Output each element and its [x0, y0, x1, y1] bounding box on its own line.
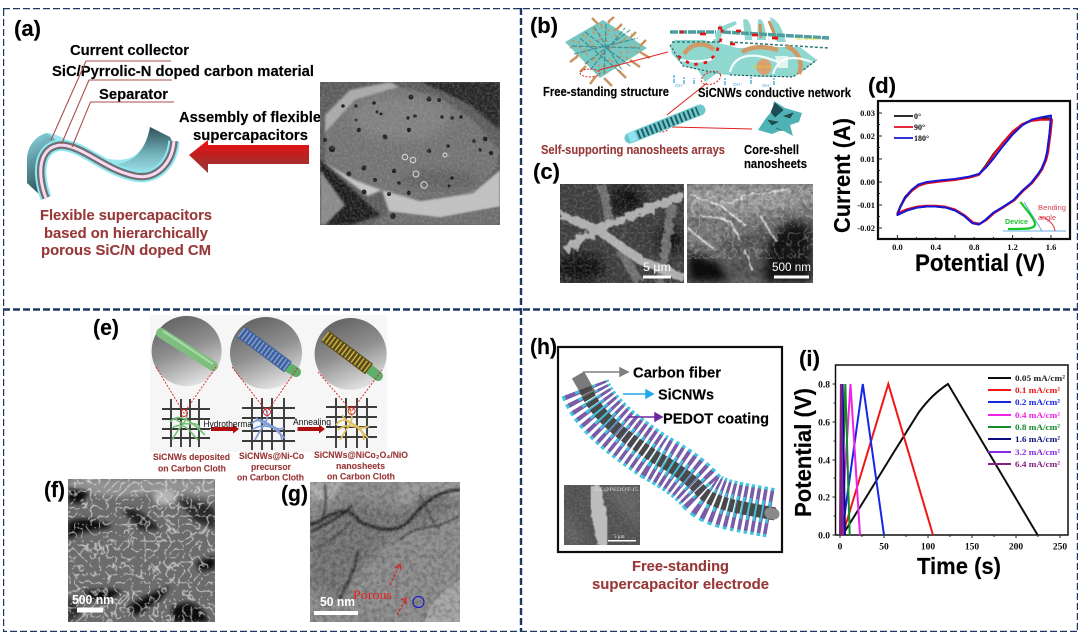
text: PEDOT coating: PEDOT coating	[663, 412, 769, 428]
arrow: SiCNWs	[623, 390, 653, 398]
label: (e): (e)	[93, 315, 119, 340]
legend: 0.1 mA/cm²	[1015, 385, 1060, 395]
legend: 0.8 mA/cm²	[1015, 422, 1060, 432]
caption: free-standing supercapacitor electrode: supercapacitor electrode	[592, 577, 769, 593]
x tick labels: 50	[879, 542, 889, 552]
icon: carbon cloth grids	[162, 398, 377, 450]
caption: SiCNWs@Ni-Co precursor: on Carbon Cloth	[237, 472, 304, 482]
icon: SiCNW conductive network: OH⁻	[762, 83, 772, 88]
panel: (g) TEM image	[281, 481, 460, 622]
text: SiCNWs conductive network: SiCNWs conductive network	[698, 85, 852, 100]
arrow: PEDOT	[628, 413, 662, 421]
inset: bending angle diagram	[1003, 202, 1066, 231]
inset: SEM of coated fiber: 5 µm	[614, 535, 625, 540]
arrow: hydrothermal	[211, 424, 239, 434]
text: core-shell nanosheets: nanosheets	[744, 157, 807, 171]
icon: SiCNW conductive network: SiC nanowire	[796, 37, 819, 41]
caption: SiCNWs@NiCo2O4/NiO: on Carbon Cloth	[327, 472, 395, 482]
image: SEM micrograph f	[68, 479, 215, 622]
icon: curved supercapacitor device	[27, 127, 174, 198]
text: carbon fiber: Carbon fiber	[633, 366, 721, 382]
caption: SiCNWs deposited: SiCNWs deposited	[153, 452, 230, 462]
scale bar: 50 nm: 50 nm	[320, 595, 355, 609]
frame: electrode schematic	[558, 347, 782, 552]
caption: flexible supercapacitors: porous SiC/N doped CM	[41, 243, 211, 259]
arrows: porous regions	[390, 564, 406, 615]
y tick labels: 0.00	[860, 177, 875, 187]
backdrop of schematic	[150, 315, 387, 452]
chart: cyclic voltammetry under bending	[857, 101, 1070, 252]
label: (b): (b)	[530, 13, 558, 38]
text: core-shell nanosheets	[744, 143, 807, 171]
label: (c): (c)	[533, 159, 560, 184]
y tick labels: -0.01	[857, 200, 875, 210]
text: SiCNWs: SiCNWs	[658, 388, 714, 404]
caption: SiCNWs@NiCo2O4/NiO: SiCNWs@NiCo₂O₄/NiO	[314, 450, 408, 460]
text: hydrothermal: Hydrotherma	[204, 419, 252, 429]
legend: 180°	[914, 134, 929, 143]
y tick labels: 0.0	[818, 532, 830, 542]
y tick labels: 0.8	[818, 380, 830, 390]
icon: zoom circle with gold nanowire	[315, 318, 387, 390]
annotation: porous: Porous	[353, 587, 392, 602]
panel: (c) SEM images	[533, 159, 813, 283]
legend	[988, 373, 1065, 469]
image: SEM 500 nm	[687, 184, 813, 283]
panel: (f) SEM nanosheets	[44, 477, 215, 622]
inset: SEM of coated fiber: SiC@PEDOT-15	[594, 488, 639, 493]
panel: (i) charge-discharge chart	[790, 346, 1068, 579]
y tick labels: 0.6	[818, 418, 830, 428]
icon: fiber with SiCNWs and PEDOT bristles	[578, 375, 775, 514]
axis title: current: Current (A)	[829, 118, 855, 233]
text: core-shell nanosheets: Core-shell	[744, 143, 799, 157]
inset: bending angle diagram: angle	[1038, 213, 1056, 222]
caption: free-standing supercapacitor electrode: Free-standing	[632, 559, 729, 575]
text: current collector: Current collector	[70, 43, 189, 59]
legend: 0.2 mA/cm²	[1015, 397, 1060, 407]
panel: (b) self-supporting nanosheets	[530, 13, 852, 171]
image: TEM micrograph	[310, 482, 460, 622]
icon: SiCNW conductive network: Carbon fiber	[752, 65, 774, 69]
caption: flexible supercapacitors: Flexible supercapacitors	[40, 208, 212, 224]
x tick labels	[892, 242, 1056, 252]
caption: SiCNWs@Ni-Co precursor: SiCNWs@Ni-Co	[239, 451, 304, 461]
arrow: annealing	[298, 424, 325, 434]
icon: free-standing woven mat	[565, 17, 650, 86]
x tick labels: 100	[921, 542, 935, 552]
caption: SiCNWs@Ni-Co precursor	[237, 451, 304, 482]
label: (d): (d)	[868, 73, 896, 98]
icon: coated nanowire	[629, 110, 700, 138]
scale bar: 50 nm	[314, 595, 358, 615]
y tick labels: 0.2	[818, 494, 830, 504]
y tick labels	[818, 380, 830, 542]
caption: flexible supercapacitors	[40, 208, 212, 259]
curves	[840, 384, 1038, 535]
caption: SiCNWs deposited: on Carbon Cloth	[158, 464, 226, 474]
curves: 0, 90, 180 degrees	[897, 115, 1052, 224]
image: porous SEM micrograph	[320, 82, 500, 225]
legend: 6.4 mA/cm²	[1015, 459, 1060, 469]
image: SEM 5 µm	[560, 184, 684, 283]
y tick labels: 0.4	[818, 456, 830, 466]
legend	[894, 112, 929, 143]
x tick labels: 1.2	[1007, 242, 1018, 252]
y tick labels: 0.02	[860, 131, 875, 141]
x tick labels: 0.4	[930, 242, 942, 252]
caption: SiCNWs@NiCo2O4/NiO	[314, 450, 408, 482]
inset: bending angle diagram: Device	[1005, 217, 1028, 226]
icon: SiCNW conductive network: OH⁻	[733, 82, 743, 87]
arrow: red assembly arrow	[189, 140, 309, 173]
chart: galvanostatic charge-discharge	[818, 365, 1068, 552]
icon: SiCNW conductive network	[670, 17, 829, 88]
text: assembly of flexible supercapacitors: Assembly of flexible	[179, 110, 321, 126]
text: assembly of flexible supercapacitors	[179, 110, 321, 144]
legend: 0.4 mA/cm²	[1015, 410, 1060, 420]
x tick labels: 0.0	[892, 242, 903, 252]
panel: (a) flexible supercapacitors	[14, 16, 500, 259]
y tick labels: 0.01	[860, 154, 875, 164]
axis title: potential: Potential (V)	[790, 388, 816, 517]
arrow: carbon fiber	[583, 368, 628, 376]
axis title: potential: Potential (V)	[915, 250, 1045, 277]
x tick labels: 200	[1009, 542, 1023, 552]
y tick labels	[857, 108, 875, 233]
caption: flexible supercapacitors: based on hierarchically	[44, 226, 208, 242]
legend: 0°	[914, 112, 921, 121]
axis title: time: Time (s)	[917, 553, 1001, 579]
text: self-supporting nanosheets arrays: Self-supporting nanosheets arrays	[541, 142, 725, 157]
icon: zoom circle with blue nanowire	[230, 317, 302, 389]
label: (f): (f)	[44, 477, 65, 502]
x tick labels: 250	[1053, 542, 1067, 552]
leader lines	[51, 61, 174, 147]
x tick labels: 1.6	[1046, 242, 1056, 252]
legend: 0.05 mA/cm²	[1015, 373, 1065, 383]
caption: SiCNWs@NiCo2O4/NiO: nanosheets	[336, 461, 385, 471]
legend: 90°	[914, 123, 925, 132]
caption: free-standing supercapacitor electrode	[592, 559, 769, 593]
text: free-standing structure: Free-standing structure	[543, 84, 669, 99]
scale bar: 5 µm	[643, 262, 671, 278]
text: active material: SiC/Pyrrolic-N doped carbon material	[52, 64, 314, 80]
inset: SEM of coated fiber	[564, 485, 640, 545]
label: (g): (g)	[281, 481, 308, 506]
x tick labels	[838, 542, 1067, 552]
scale bar: 500 nm: 500 nm	[72, 593, 114, 607]
x tick labels: 0	[838, 542, 843, 552]
label: (a): (a)	[14, 16, 41, 41]
x tick labels: 0.8	[969, 242, 980, 252]
x tick labels: 150	[965, 542, 979, 552]
legend: 3.2 mA/cm²	[1015, 447, 1060, 457]
text: annealing: Annealing	[293, 417, 331, 427]
caption: SiCNWs@Ni-Co precursor: precursor	[251, 462, 291, 472]
text: assembly of flexible supercapacitors: supercapacitors	[193, 128, 308, 144]
scale bar: 5 µm: 5 µm	[643, 262, 671, 274]
marker: blue circle	[413, 596, 424, 608]
label: (h): (h)	[530, 334, 557, 359]
connector lines and dashed zoom rings	[580, 52, 752, 132]
label: (i): (i)	[799, 346, 820, 371]
caption: SiCNWs deposited	[153, 452, 230, 474]
panel: (h) free-standing electrode	[530, 334, 782, 593]
icon: zoom circle with green nanowire	[152, 316, 222, 386]
y tick labels: 0.03	[860, 108, 875, 118]
panel: (e) synthesis schematic	[93, 315, 408, 482]
y tick labels: -0.02	[857, 223, 875, 233]
legend: 1.6 mA/cm²	[1015, 434, 1060, 444]
scale bar: 500 nm: 500 nm	[772, 262, 811, 274]
icon: core-shell nanosheet	[758, 101, 802, 136]
text: separator: Separator	[99, 87, 168, 103]
inset: bending angle diagram: Bending	[1038, 203, 1066, 212]
icon: SiCNW conductive network: OH⁻	[675, 83, 685, 88]
panel: (d) CV chart	[829, 73, 1070, 277]
dashed zoom connectors	[156, 367, 382, 416]
